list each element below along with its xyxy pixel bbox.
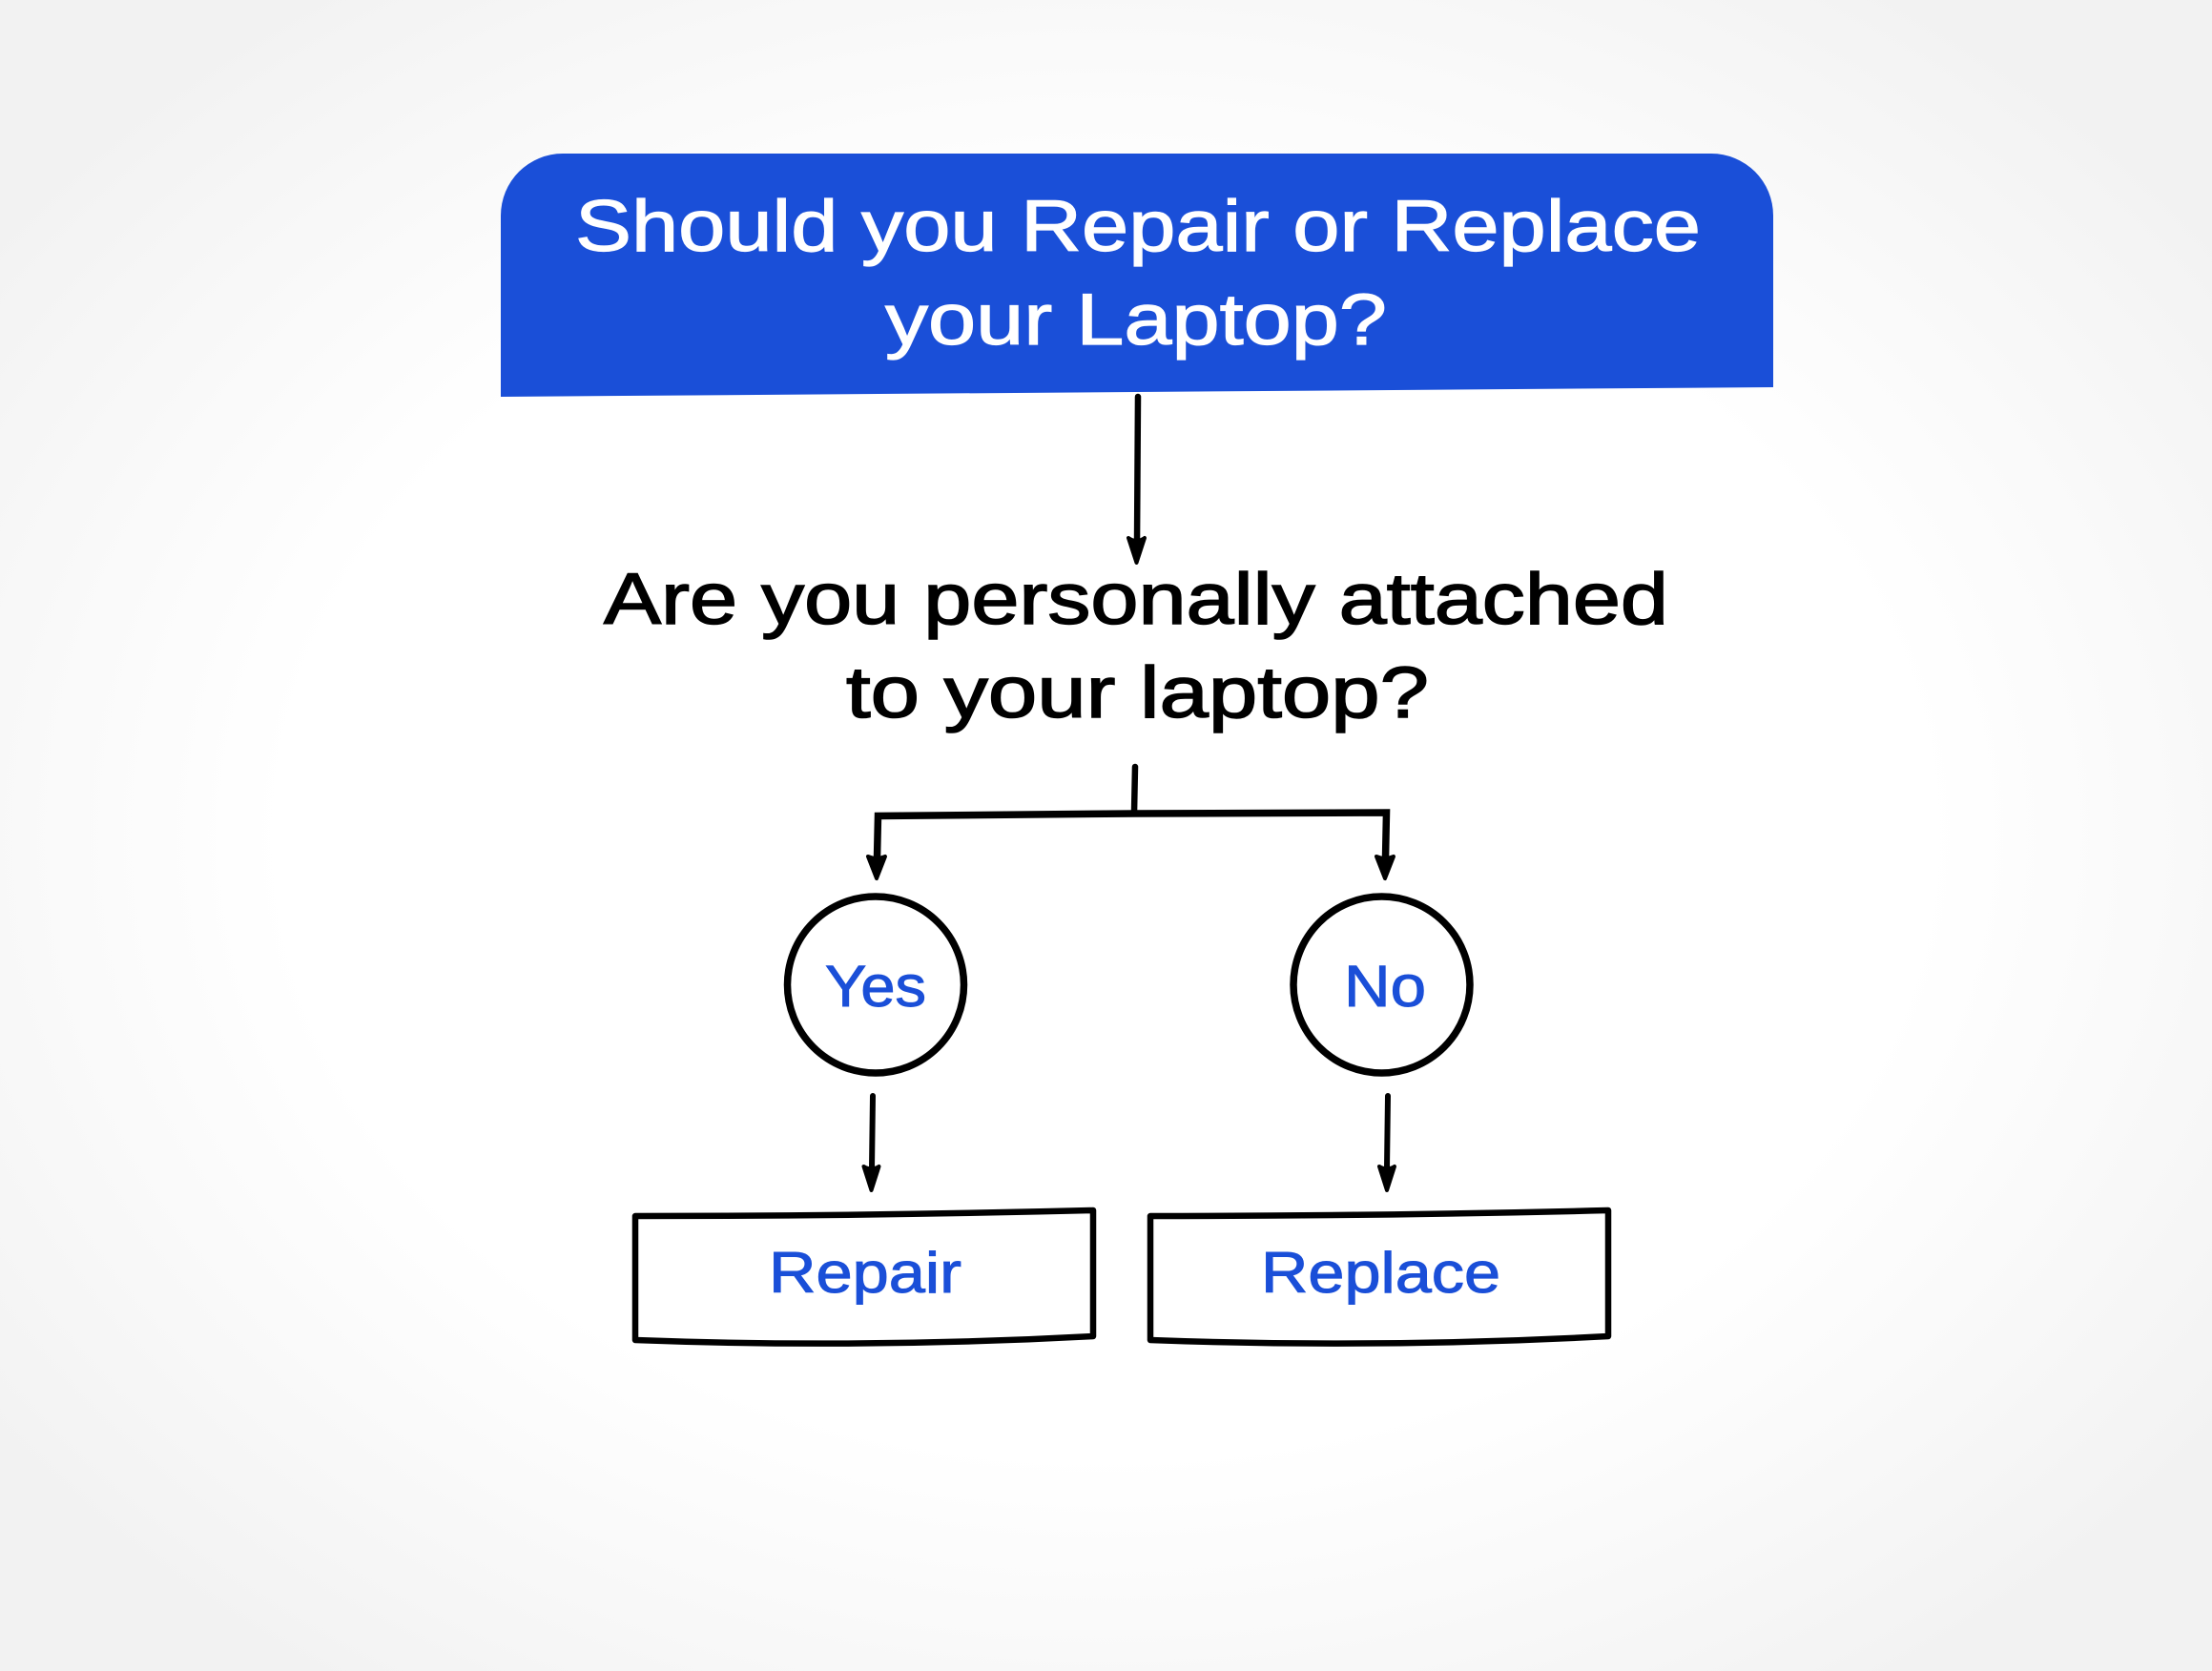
arrow: branch to yes and no <box>868 767 1394 878</box>
arrow: no to replace <box>1379 1096 1395 1190</box>
box: replace <box>1150 1210 1608 1344</box>
title text: Should you Repair or Replace <box>575 186 1701 267</box>
option: yes circle <box>788 897 963 1073</box>
box: replace: Replace <box>1261 1241 1500 1305</box>
box: repair: Repair <box>769 1241 961 1305</box>
question text: Are you personally attached <box>604 559 1668 640</box>
question text <box>604 559 1668 733</box>
panel: title banner <box>501 154 1773 397</box>
option: no circle: No <box>1344 954 1426 1019</box>
arrow: yes to repair <box>864 1096 879 1190</box>
title text <box>575 186 1701 361</box>
option: no circle <box>1293 897 1470 1073</box>
box: repair <box>635 1210 1093 1344</box>
option: yes circle: Yes <box>825 954 926 1019</box>
arrow: title to question <box>1128 397 1145 563</box>
question text: to your laptop? <box>846 652 1429 733</box>
title text: your Laptop? <box>885 279 1387 361</box>
